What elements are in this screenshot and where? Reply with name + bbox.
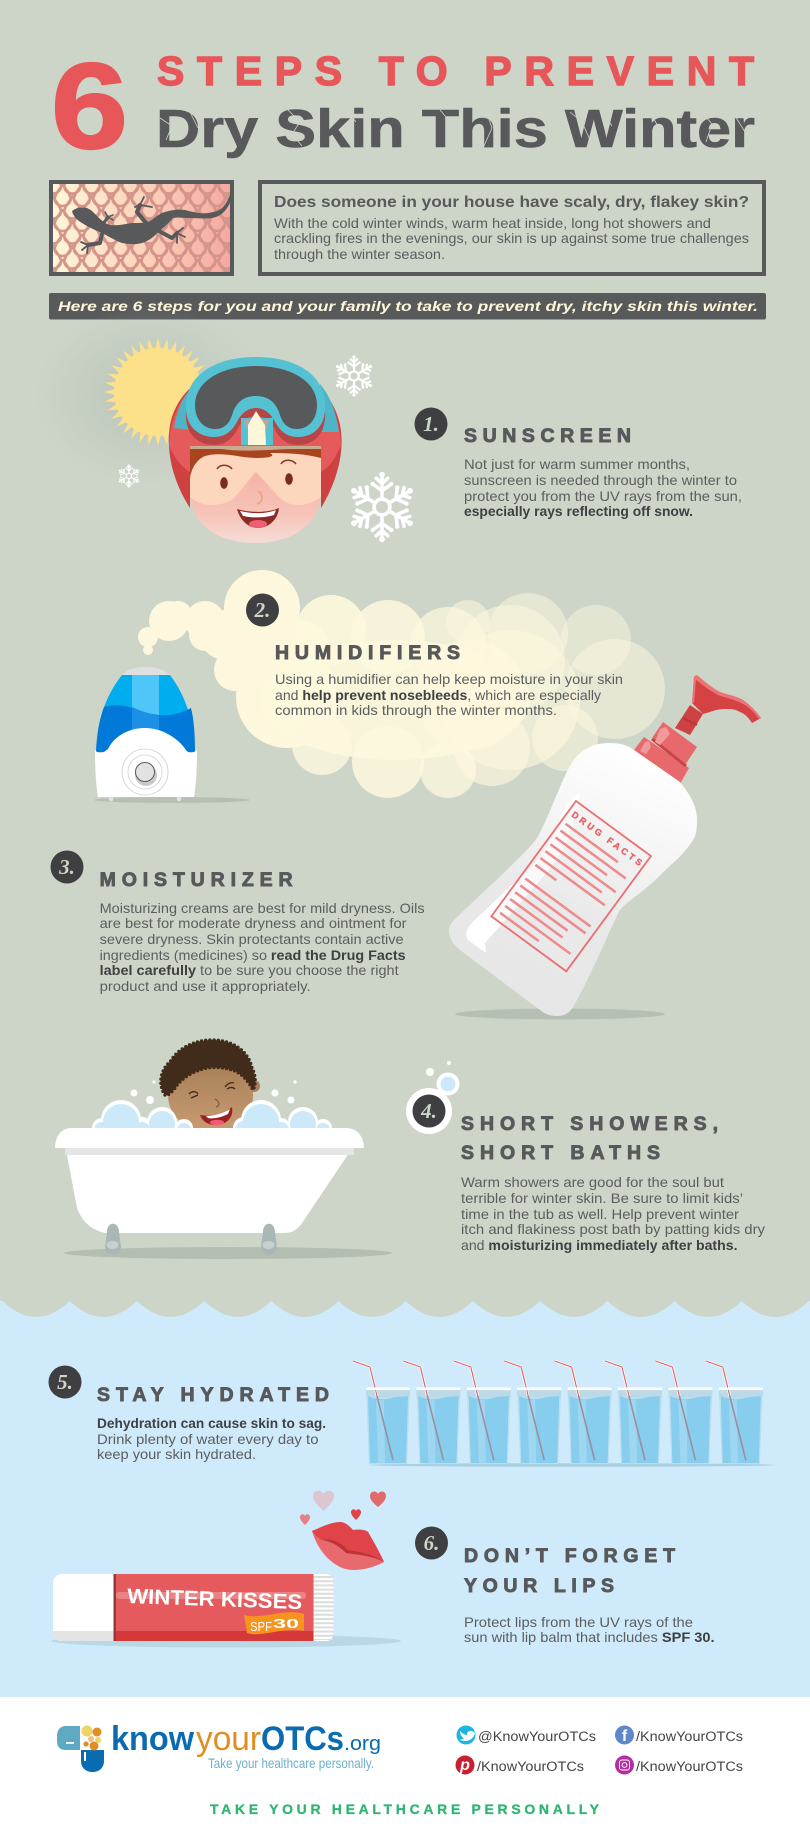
social: pinterest: /KnowYourOTCs bbox=[477, 1759, 584, 1774]
body: sun with lip balm that includes SPF 30. bbox=[464, 1630, 715, 1645]
spf flag: 30 bbox=[273, 1616, 299, 1631]
logo capsule icon bbox=[57, 1726, 104, 1772]
pump bbox=[634, 675, 761, 784]
step 2: humidifiers bbox=[246, 594, 623, 718]
social: twitter bbox=[456, 1726, 596, 1744]
illustration: child in bathtub bbox=[55, 1040, 392, 1259]
body: Not just for warm summer months, bbox=[464, 457, 690, 472]
icon: sun bbox=[89, 327, 227, 457]
heading bbox=[464, 1545, 675, 1597]
step 3: moisturizer bbox=[50, 850, 425, 994]
body: itch and flakiness post bath by patting kids dry bbox=[461, 1222, 765, 1237]
hearts bbox=[300, 1491, 386, 1525]
body: Using a humidifier can help keep moisture in your skin bbox=[275, 672, 623, 687]
body: and moisturizing immediately after baths. bbox=[461, 1238, 738, 1253]
body: especially rays reflecting off snow. bbox=[464, 504, 693, 519]
body: sunscreen is needed through the winter to bbox=[464, 473, 737, 488]
illustration: moisturizer bottle bbox=[449, 675, 761, 1020]
panel: footer bbox=[0, 1697, 810, 1845]
cap bbox=[53, 1574, 114, 1641]
heading: DON’T FORGET bbox=[464, 1545, 675, 1567]
logo bbox=[57, 1720, 381, 1772]
bottle highlight bbox=[466, 792, 580, 953]
badge 6 bbox=[415, 1526, 448, 1560]
heading: SHORT BATHS bbox=[461, 1142, 660, 1164]
icon: snowflakes bbox=[117, 355, 418, 542]
banner: here are 6 steps bbox=[49, 293, 766, 320]
badge 5: 5. bbox=[57, 1370, 73, 1394]
title bbox=[51, 38, 755, 174]
body bbox=[275, 672, 623, 718]
heading: HUMIDIFIERS bbox=[275, 642, 460, 664]
logo wordmark: .org bbox=[344, 1733, 381, 1755]
illustration: steam cloud bbox=[138, 570, 665, 798]
shadow bbox=[64, 1247, 392, 1259]
heading bbox=[461, 1113, 718, 1164]
logo wordmark bbox=[111, 1720, 381, 1758]
body: Protect lips from the UV rays of the bbox=[464, 1615, 693, 1630]
body: Drink plenty of water every day to bbox=[97, 1432, 318, 1447]
icon: face bbox=[190, 446, 321, 543]
logo wordmark: your bbox=[196, 1720, 261, 1758]
badge 1: 1. bbox=[423, 412, 439, 436]
heading: SUNSCREEN bbox=[464, 425, 631, 447]
body: label carefully to be sure you choose the right bbox=[100, 963, 399, 978]
body: common in kids through the winter months. bbox=[275, 703, 557, 718]
body: are best for moderate dryness and ointment for bbox=[100, 916, 407, 931]
drug facts label bbox=[491, 801, 651, 971]
panel: blue lower section with scalloped edge bbox=[0, 1301, 810, 1845]
heading: SHORT SHOWERS, bbox=[461, 1113, 718, 1135]
illustration: lips and hearts bbox=[300, 1491, 386, 1570]
body: Warm showers are good for the soul but bbox=[461, 1175, 724, 1190]
intro body: crackling fires in the evenings, our skin is up against some true challenges bbox=[274, 231, 749, 246]
intro body: With the cold winter winds, warm heat inside, long hot showers and bbox=[274, 216, 711, 231]
feet bbox=[105, 1224, 277, 1254]
social: facebook: f bbox=[622, 1728, 628, 1745]
big number six: 6 bbox=[51, 38, 128, 174]
badge 4 with bubbles bbox=[406, 1061, 460, 1134]
soap bubbles bbox=[92, 1080, 332, 1140]
illustration: lip balm tube bbox=[51, 1574, 401, 1648]
body: Moisturizing creams are best for mild dryness. Oils bbox=[100, 901, 425, 916]
badge 3 bbox=[50, 850, 84, 884]
tub bbox=[55, 1128, 364, 1233]
label bbox=[114, 1574, 314, 1641]
social: pinterest: p bbox=[459, 1757, 470, 1774]
body: protect you from the UV rays from the sun, bbox=[464, 489, 742, 504]
child head bbox=[161, 1040, 260, 1132]
social: twitter: @KnowYourOTCs bbox=[478, 1729, 596, 1744]
badge 4 with bubbles: 4. bbox=[420, 1099, 437, 1123]
logo wordmark: OTCs bbox=[261, 1720, 344, 1758]
heading: MOISTURIZER bbox=[100, 869, 293, 891]
badge 2 bbox=[246, 594, 279, 626]
body bbox=[97, 1416, 326, 1462]
body bbox=[461, 1175, 765, 1253]
heading: YOUR LIPS bbox=[464, 1575, 614, 1597]
social: facebook bbox=[615, 1726, 743, 1745]
step 4: short showers, short baths bbox=[406, 1061, 765, 1253]
logo tagline: Take your healthcare personally. bbox=[208, 1755, 374, 1771]
intro body: through the winter season. bbox=[274, 247, 445, 262]
logo wordmark: know bbox=[111, 1720, 195, 1758]
badge 5 bbox=[48, 1366, 82, 1398]
panel: intro text box bbox=[260, 182, 764, 274]
badge 6: 6. bbox=[424, 1531, 439, 1555]
panel: lizard scales image bbox=[51, 182, 232, 274]
icon: helmet bbox=[169, 365, 342, 508]
body: and help prevent nosebleeds , which are especially bbox=[275, 688, 601, 703]
shadow bbox=[455, 1008, 665, 1020]
social: instagram bbox=[615, 1756, 743, 1774]
intro heading: Does someone in your house have scaly, dry, flakey skin? bbox=[274, 194, 749, 211]
shadow bbox=[94, 797, 250, 803]
illustration: eight glasses of water bbox=[353, 1361, 776, 1467]
badge 1 bbox=[414, 408, 448, 440]
spf flag: SPF bbox=[250, 1620, 272, 1634]
body: ingredients (medicines) so read the Drug Facts bbox=[100, 948, 406, 963]
brand text: WINTER KISSES bbox=[127, 1585, 303, 1614]
banner: here are 6 steps: Here are 6 steps for you and your family to take to prevent dry, itchy skin this winter. bbox=[58, 298, 758, 314]
body: product and use it appropriately. bbox=[100, 979, 311, 994]
step 6: don't forget your lips bbox=[415, 1526, 715, 1645]
illustration: skier with sun and snowflakes bbox=[35, 305, 418, 543]
title line one: STEPS TO PREVENT bbox=[157, 48, 754, 94]
body: time in the tub as well. Help prevent winter bbox=[461, 1207, 740, 1222]
social: facebook: /KnowYourOTCs bbox=[636, 1729, 743, 1744]
tagline: TAKE YOUR HEALTHCARE PERSONALLY bbox=[210, 1801, 600, 1817]
bottle body bbox=[449, 743, 697, 1016]
icon: lizard bbox=[72, 195, 230, 253]
body: severe dryness. Skin protectants contain active bbox=[100, 932, 404, 947]
body bbox=[464, 457, 742, 519]
social: pinterest bbox=[456, 1756, 584, 1774]
icon: goggles bbox=[186, 357, 325, 445]
step 1: sunscreen bbox=[414, 408, 742, 519]
ridged end bbox=[314, 1574, 334, 1641]
lips bbox=[312, 1522, 384, 1570]
drug facts label: DRUG FACTS bbox=[570, 809, 644, 868]
badge 3: 3. bbox=[58, 855, 75, 879]
shadow bbox=[51, 1634, 401, 1648]
body: keep your skin hydrated. bbox=[97, 1447, 256, 1462]
body bbox=[100, 901, 425, 994]
body bbox=[464, 1615, 715, 1645]
step 5: stay hydrated bbox=[48, 1366, 329, 1462]
body: Dehydration can cause skin to sag. bbox=[97, 1416, 326, 1431]
title line two: Dry Skin This Winter bbox=[156, 99, 755, 159]
heading: STAY HYDRATED bbox=[97, 1384, 329, 1406]
badge 2: 2. bbox=[254, 598, 270, 622]
body: terrible for winter skin. Be sure to limit kids’ bbox=[461, 1191, 743, 1206]
social: instagram: /KnowYourOTCs bbox=[636, 1759, 743, 1774]
spf flag bbox=[244, 1612, 304, 1634]
illustration: humidifier bbox=[94, 667, 250, 803]
intro body bbox=[274, 216, 749, 262]
